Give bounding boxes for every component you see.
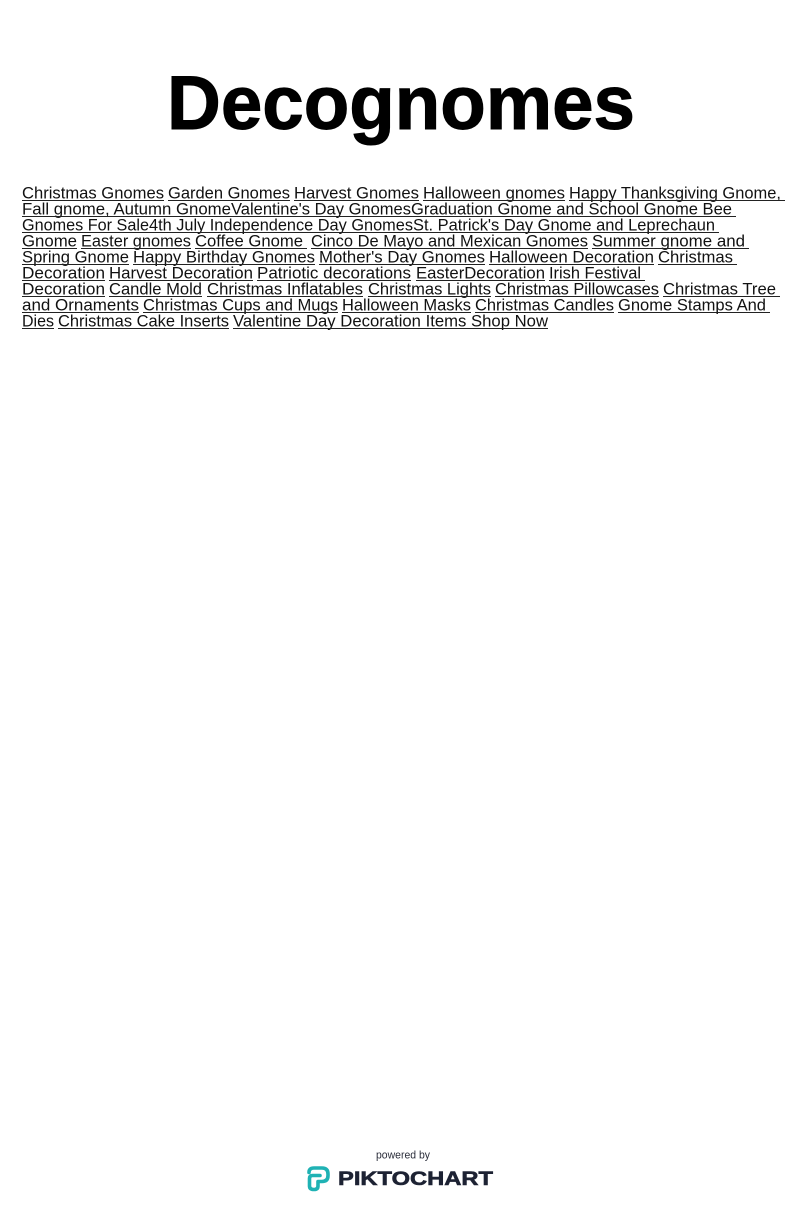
link line 3 xyxy=(22,216,719,234)
link line 6: Decoration xyxy=(22,264,105,282)
link line 8: and Ornaments xyxy=(22,296,139,314)
link line 7: Christmas Lights xyxy=(368,280,491,298)
link line 4: Coffee Gnome xyxy=(195,232,303,250)
link line 2: Fall gnome, Autumn Gnome xyxy=(22,200,231,218)
link line 2: Valentine's Day Gnomes xyxy=(231,200,411,218)
link line 8: Christmas Cups and Mugs xyxy=(143,296,338,314)
link line 4 xyxy=(22,232,749,250)
link line 7: Candle Mold xyxy=(109,280,202,298)
link line 6 xyxy=(22,264,645,282)
link line 8: Christmas Candles xyxy=(475,296,614,314)
powered by caption: powered by xyxy=(376,1150,430,1162)
link line 1: Happy Thanksgiving Gnome, xyxy=(569,184,781,202)
link line 3: Gnomes For Sale xyxy=(22,216,149,234)
link line 7: Christmas Pillowcases xyxy=(495,280,659,298)
link line 7: Christmas Inflatables xyxy=(207,280,363,298)
icon: Piktochart P mark xyxy=(309,1168,328,1190)
link line 8: Halloween Masks xyxy=(342,296,471,314)
link line 6: EasterDecoration xyxy=(416,264,545,282)
link line 3: St. Patrick's Day Gnome and Leprechaun xyxy=(413,216,715,234)
link line 2 xyxy=(22,200,736,218)
link line 4: Easter gnomes xyxy=(81,232,191,250)
link line 1: Christmas Gnomes xyxy=(22,184,164,202)
link line 5: Halloween Decoration xyxy=(489,248,654,266)
link line 7: Decoration xyxy=(22,280,105,298)
link line 5: Mother's Day Gnomes xyxy=(319,248,485,266)
link line 5: Happy Birthday Gnomes xyxy=(133,248,315,266)
link line 7: Christmas Tree xyxy=(663,280,776,298)
link line 8 xyxy=(22,296,770,314)
link line 1 xyxy=(22,184,785,202)
link line 9 xyxy=(22,312,548,330)
link line 9: Christmas Cake Inserts xyxy=(58,312,229,330)
link line 7 xyxy=(22,280,780,298)
link line 1: Harvest Gnomes xyxy=(294,184,419,202)
powered by Piktochart logo xyxy=(309,1150,493,1190)
link line 4: Cinco De Mayo and Mexican Gnomes xyxy=(311,232,588,250)
link line 2: Graduation Gnome and School Gnome Bee xyxy=(411,200,732,218)
link line 5: Christmas xyxy=(658,248,733,266)
link line 9: Valentine Day Decoration Items Shop Now xyxy=(233,312,548,330)
link line 5: Spring Gnome xyxy=(22,248,129,266)
link line 6: Harvest Decoration xyxy=(109,264,253,282)
Piktochart wordmark: PIKTOCHART xyxy=(338,1168,493,1190)
link line 8: Gnome Stamps And xyxy=(618,296,766,314)
link line 4: Gnome xyxy=(22,232,77,250)
link line 1: Garden Gnomes xyxy=(168,184,290,202)
link line 5 xyxy=(22,248,737,266)
link line 6: Irish Festival xyxy=(549,264,641,282)
link line 1: Halloween gnomes xyxy=(423,184,565,202)
link line 9: Dies xyxy=(22,312,54,330)
link line 6: Patriotic decorations xyxy=(257,264,411,282)
title: Decognomes xyxy=(167,61,635,146)
link list text block xyxy=(22,184,785,330)
link line 4: Summer gnome and xyxy=(592,232,745,250)
link line 3: 4th July Independence Day Gnomes xyxy=(149,216,413,234)
